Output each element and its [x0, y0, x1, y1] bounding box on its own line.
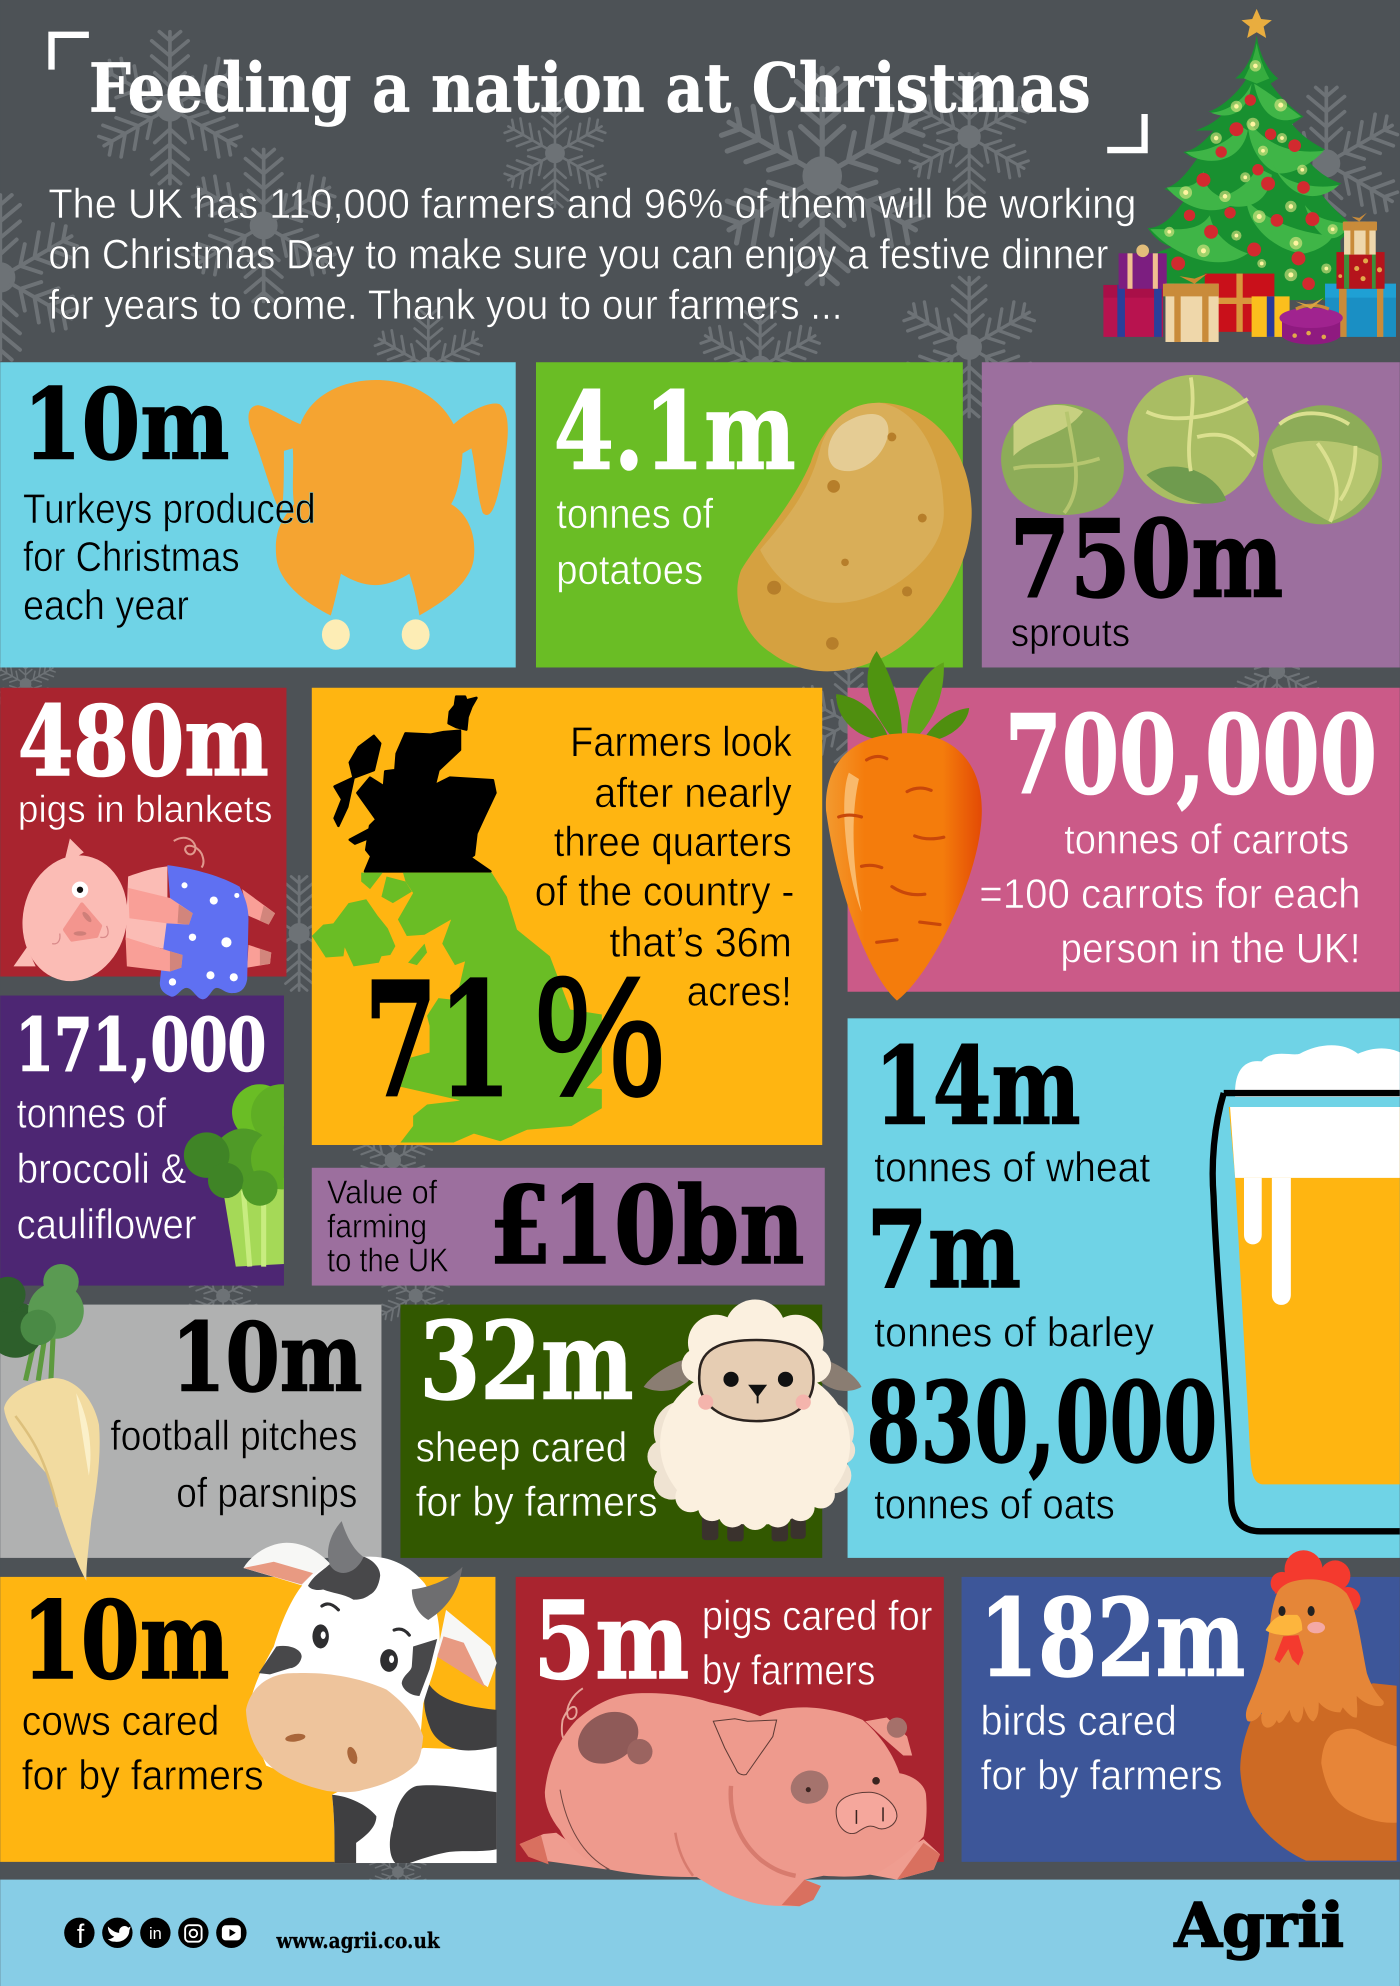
icon: carrot [826, 651, 982, 1001]
cow head [252, 1556, 440, 1769]
intro text: The UK has 110,000 farmers and 96% of them will be working [48, 180, 1136, 227]
label: farmland: three quarters [554, 818, 792, 865]
pig right foot [863, 1839, 940, 1880]
pig spots [569, 1702, 880, 1808]
stat: 32m: 32m [419, 1299, 634, 1424]
panel: potatoes [536, 362, 972, 671]
label: cows: for by farmers [22, 1752, 264, 1799]
label: carrots: tonnes of carrots [1064, 816, 1349, 863]
label: value of farming: to the UK [327, 1242, 449, 1279]
label: oats: tonnes of oats [874, 1481, 1115, 1528]
stat: 7m barley: 7m [867, 1188, 1021, 1313]
stacked tan present [1343, 213, 1377, 255]
map: Galloway [361, 873, 412, 903]
label: farmland: acres! [687, 968, 792, 1015]
label: broccoli: broccoli & [17, 1145, 187, 1192]
label: potatoes: potatoes [556, 546, 703, 593]
label: parsnips [110, 1412, 357, 1516]
stat: 171,000: 171,000 [15, 1002, 266, 1088]
label: barley: tonnes of barley [874, 1308, 1154, 1355]
pig snout [836, 1792, 897, 1834]
map: Ireland [312, 899, 395, 966]
footer [0, 1880, 1400, 1986]
label: birds [981, 1697, 1222, 1799]
stat: 830,000 oats: 830,000 [867, 1359, 1217, 1488]
stat: 480m: 480m [18, 685, 269, 798]
map: Scotland [335, 697, 495, 871]
stat: 71%: 71 [364, 948, 512, 1134]
panel: value of farming [312, 1164, 825, 1289]
icon: christmas tree with presents [1103, 9, 1396, 345]
intro text: on Christmas Day to make sure you can enjoy a festive dinner [48, 231, 1109, 278]
pig back foot [520, 1833, 607, 1869]
panel: birds [962, 1550, 1400, 1862]
panel: sprouts [982, 362, 1400, 667]
label: carrots: =100 carrots for each [979, 870, 1361, 917]
label: carrots [979, 816, 1361, 972]
crimson present [1103, 285, 1163, 337]
label: potatoes [556, 490, 714, 593]
label: sheep: sheep cared [416, 1424, 627, 1471]
panel: sheep [400, 1299, 861, 1558]
label: broccoli [17, 1089, 197, 1248]
stat: 182m: 182m [979, 1577, 1245, 1702]
stat: £10bn: £10bn [489, 1164, 804, 1289]
stat: 10m cows: 10m [22, 1579, 229, 1704]
stat: 750m sprouts: 750m [1010, 498, 1283, 623]
label: value of farming: farming [327, 1207, 427, 1244]
label: sheep: for by farmers [416, 1478, 658, 1525]
cow spots [259, 1557, 437, 1696]
yellow present [1252, 296, 1290, 337]
label: birds: birds cared [981, 1697, 1177, 1744]
label: potatoes: tonnes of [556, 490, 714, 537]
label: wheat: tonnes of wheat [874, 1144, 1151, 1191]
icon: social media [64, 1918, 247, 1949]
icon: pig [520, 1688, 940, 1906]
title bracket bottom right [1107, 114, 1148, 153]
stacked red present [1336, 252, 1385, 289]
map: England and Wales [387, 873, 602, 1142]
icon: hen [1240, 1550, 1397, 1861]
stat: 4.1m potatoes: 4.1m [554, 370, 796, 495]
cow body [332, 1747, 497, 1863]
label: value of farming [327, 1173, 449, 1279]
label: turkeys [23, 485, 316, 628]
label: farmland [535, 718, 794, 1015]
icon: cow [243, 1521, 497, 1863]
title: Feeding a nation at Christmas [89, 48, 1091, 127]
stat: 10m parsnips: 10m [171, 1303, 362, 1414]
title bracket top left [48, 32, 89, 70]
logo: Agrii: Agrii [1173, 1891, 1344, 1962]
intro text [48, 180, 1136, 328]
intro text: for years to come. Thank you to our farmers ... [48, 281, 842, 328]
blue present [1325, 284, 1396, 337]
label: pigs in blankets: pigs in blankets [18, 789, 273, 831]
cow eyes [312, 1604, 409, 1672]
label: sprouts: sprouts [1011, 611, 1130, 655]
panel: parsnips [0, 1303, 381, 1558]
panel: cows [0, 1521, 497, 1863]
red present [1205, 274, 1274, 332]
panel: pigs in blankets [0, 685, 286, 999]
map: Isle of Man [408, 944, 427, 965]
icon: social media: f [77, 1919, 85, 1949]
cow muzzle [246, 1673, 423, 1792]
pig ear [713, 1719, 777, 1775]
label: sheep [416, 1424, 658, 1525]
label: carrots: person in the UK! [1060, 925, 1361, 972]
icon: turkey [248, 380, 508, 650]
label: birds: for by farmers [981, 1752, 1222, 1799]
panel: grains [848, 1018, 1400, 1558]
label: value of farming: Value of [327, 1173, 438, 1210]
cow left ear [243, 1543, 332, 1586]
label: farmland: that’s 36m [609, 918, 792, 965]
label: pigs cared for: pigs cared for [702, 1592, 932, 1639]
label: parsnips: football pitches [110, 1412, 357, 1459]
round purple present [1279, 298, 1343, 345]
tan present [1163, 274, 1219, 342]
cow right ear [437, 1610, 497, 1687]
stat: 5m pigs: 5m [533, 1579, 689, 1704]
panel: turkeys [0, 362, 516, 667]
label: turkeys: for Christmas [23, 533, 240, 580]
icon: social media: in [149, 1925, 162, 1943]
pig front hoof [782, 1880, 821, 1906]
header [48, 32, 1148, 328]
panel: pigs cared for [516, 1577, 944, 1906]
icon: parsnip [0, 1264, 100, 1581]
panel: farmland map [312, 688, 822, 1145]
label: pigs cared for: by farmers [702, 1647, 875, 1694]
icon: sheep [644, 1300, 861, 1541]
stat: 71%: % [535, 942, 665, 1133]
icon: pig in blanket [11, 838, 275, 999]
icon: sprouts [1001, 375, 1382, 524]
panel: broccoli and cauliflower [0, 996, 312, 1286]
icon: UK map [312, 697, 602, 1142]
panel: carrots [826, 651, 1400, 1001]
label: parsnips: of parsnips [176, 1469, 357, 1516]
label: broccoli: tonnes of [17, 1089, 166, 1136]
stat: 10m turkeys: 10m [23, 367, 229, 482]
purple present [1119, 244, 1167, 289]
label: farmland: after nearly [594, 769, 792, 816]
label: farmland: Farmers look [570, 718, 792, 765]
stat: 14m wheat: 14m [874, 1024, 1081, 1149]
label: cows [22, 1697, 264, 1799]
label: turkeys: Turkeys produced [23, 485, 316, 532]
label: turkeys: each year [23, 581, 189, 628]
label: pigs cared for [702, 1592, 932, 1694]
label: farmland: of the country - [535, 868, 794, 915]
icon: beer glass [1213, 1045, 1400, 1531]
icon: potato [737, 403, 972, 671]
label: broccoli: cauliflower [17, 1201, 197, 1248]
website: www.agrii.co.uk [275, 1929, 441, 1954]
cow horns [328, 1521, 364, 1573]
label: cows: cows cared [22, 1697, 219, 1744]
pig body [545, 1693, 927, 1906]
icon: broccoli [184, 1084, 284, 1267]
